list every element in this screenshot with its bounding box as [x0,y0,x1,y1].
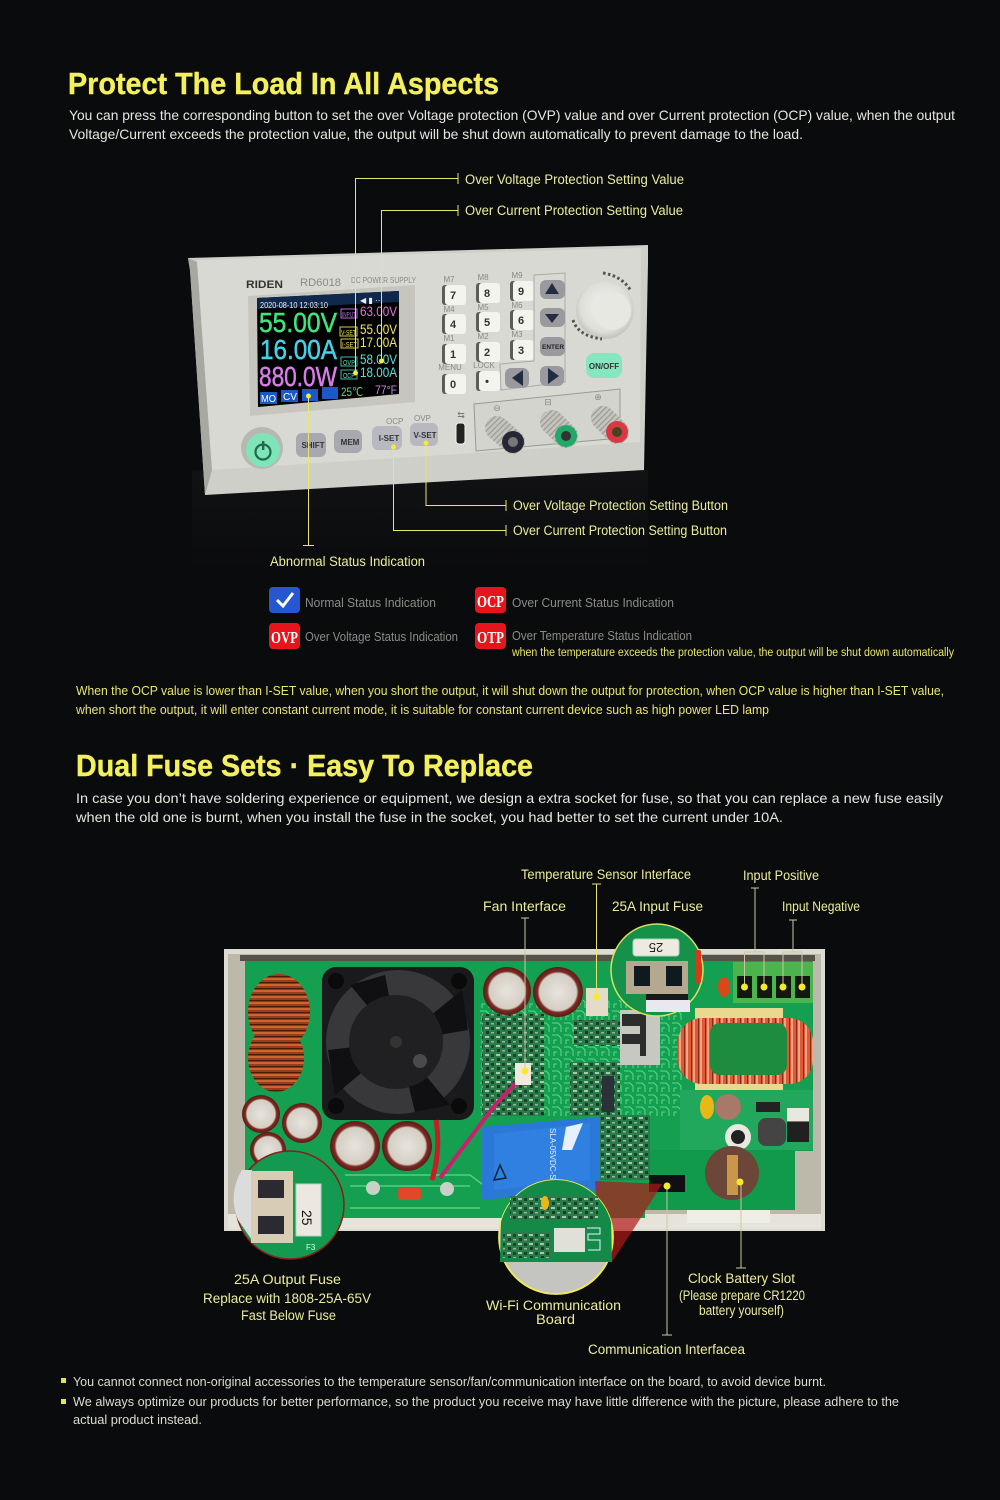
label: communication interface: Communication Interfacea [588,1342,745,1357]
power section components [700,1094,809,1150]
brand text: RIDEN [246,279,283,291]
numeric keypad: M1 [443,334,455,343]
numeric keypad: • [485,376,489,388]
function buttons: OVP [414,414,431,423]
rotary encoder knob [573,273,634,339]
label: clock battery slot: battery yourself) [699,1303,784,1318]
numeric keypad: 7 [450,290,456,302]
footnote: accessories warning: You cannot connect non-original accessories to the temperature sensor/fan/communication interface on the board, to avoid device burnt. [73,1374,826,1389]
magnifier: output fuse [234,1151,344,1259]
brand text: DC POWER SUPPLY [351,276,417,285]
numeric keypad: 9 [518,286,524,298]
callout lines: PCB [521,884,806,1335]
LCD screen: 55.00V [360,321,398,337]
function buttons [296,414,438,457]
power button [241,427,283,469]
magnifier: output fuse: 25 [299,1210,315,1226]
note: OCP and I-SET behaviour [75,683,944,717]
LCD screen: 58.00V [360,351,398,367]
magnifier: output fuse: F3 [306,1243,316,1252]
intro paragraph: Voltage/Current exceeds the protection value, the output will be shut down automatically to prevent damage to the load. [69,126,803,142]
LCD screen: 77°F [375,383,397,397]
numeric keypad: M4 [443,305,455,314]
LCD screen [257,291,399,407]
LCD screen: 63.00V [360,303,398,319]
brand text [246,276,417,291]
footnote: product optimization: actual product instead. [73,1412,202,1427]
label: over current protection value: Over Current Protection Setting Value [465,203,683,218]
numeric keypad: M7 [443,275,455,284]
icon: OCP status [475,587,506,613]
function buttons: SHIFT [301,441,325,450]
LCD screen: INPUT [342,312,356,319]
intro paragraph: You can press the corresponding button to set the over Voltage protection (OVP) value and over Current protection (OCP) value, when the output [69,107,955,123]
text: over temperature status [511,629,954,659]
arrow and enter buttons: ENTER [542,344,564,351]
red zoom cone [595,1181,662,1262]
numeric keypad: 6 [518,315,524,327]
brand text: RD6018 [300,277,341,289]
label: clock battery slot: (Please prepare CR1220 [679,1288,805,1303]
icon: OVP status [269,623,300,649]
icon: OCP status: OCP [477,592,504,611]
text: over temperature status: Over Temperature Status Indication [512,629,692,643]
numeric keypad: M6 [511,301,523,310]
temperature sensor [586,988,608,1016]
USB port: ⇆ [457,410,465,420]
magnifier: Wi-Fi board [499,1180,613,1294]
numeric keypad: M8 [477,273,489,282]
label: input negative: Input Negative [782,899,860,914]
title: protect the load: Protect The Load In All Aspects [68,66,499,101]
note: OCP and I-SET behaviour: When the OCP value is lower than I-SET value, when you short the output, it will shut down the output for protection, when OCP value is higher than I-SET value, [76,683,944,698]
label: Wi-Fi communication board [486,1298,621,1327]
LCD screen: 18.00A [360,364,398,380]
text: over voltage status: Over Voltage Status Indication [305,630,458,644]
text: normal status: Normal Status Indication [305,596,436,610]
numeric keypad: MENU [438,363,462,372]
callout lines: protection setting values [353,173,458,376]
footnote: product optimization: We always optimize our products for better performance, so the product you receive may have little difference with the picture, please adhere to the [73,1394,899,1409]
title: dual fuse sets: Dual Fuse Sets · Easy To Replace [76,748,533,783]
clock battery holder [705,1146,759,1200]
LCD screen: OVP [343,360,355,367]
fuse paragraph: when the old one is burnt, when you install the fuse in the socket, you had better to set the current under 10A. [75,809,783,825]
on/off button: ON/OFF [589,362,619,371]
LCD screen: MO [261,394,276,405]
label: over voltage protection button: Over Voltage Protection Setting Button [513,498,728,513]
label: fan interface: Fan Interface [483,899,566,914]
numeric keypad: M9 [511,271,523,280]
label: over current protection button: Over Current Protection Setting Button [513,523,727,538]
numeric keypad: 8 [484,288,490,300]
output terminals [474,389,628,453]
LCD screen: I-SET [342,342,358,349]
label: 25A output fuse [203,1272,371,1323]
icon: OVP status: OVP [271,628,298,647]
device: RD6018 power supply front panel [188,245,648,495]
numeric keypad: 5 [484,317,490,329]
numeric keypad: 3 [518,345,524,357]
relay [482,1117,600,1200]
electrolytic capacitors [242,967,583,1171]
cooling fan [322,967,474,1120]
on/off button [586,353,622,378]
numeric keypad: M5 [477,303,489,312]
label: Wi-Fi communication board: Board [536,1312,575,1327]
relay: SLA-05VDC-SL [548,1128,557,1185]
fuse paragraph: In case you don’t have soldering experience or equipment, we design a extra socket for fuse, so that you can replace a new fuse easily [76,790,943,806]
LCD screen: CV [283,392,297,403]
text: over current status: Over Current Status Indication [512,596,674,610]
LCD screen: 2020-08-10 12:03:10 [260,301,328,310]
PCB photo in enclosure [224,924,825,1294]
fan connector [515,1063,531,1085]
function buttons: I-SET [379,434,399,443]
magnifier: input fuse: 25 [649,940,663,955]
label: clock battery slot: Clock Battery Slot [688,1271,795,1286]
note: OCP and I-SET behaviour: when short the output, it will enter constant current mode, it is suitable for constant current device such as high power LED lamp [75,702,769,717]
label: temperature sensor interface: Temperature Sensor Interface [521,867,691,882]
icon: OTP status [475,623,506,649]
small input capacitor [718,977,730,997]
label: 25A input fuse: 25A Input Fuse [612,899,703,914]
numeric keypad: 1 [450,349,456,361]
LCD screen: 16.00A [260,334,337,365]
numeric keypad [438,271,534,394]
footnote: product optimization [61,1394,899,1427]
bottom latches [687,1210,770,1223]
function buttons: MEM [341,438,360,447]
label: 25A output fuse: Replace with 1808-25A-65V [203,1291,371,1306]
LCD screen: 55.00V [259,307,337,338]
label: input positive: Input Positive [743,868,819,883]
label: 25A output fuse: 25A Output Fuse [234,1272,341,1287]
LCD screen: V-SET [341,330,357,337]
communication header [649,1175,685,1192]
numeric keypad: 2 [484,347,490,359]
numeric keypad: M3 [511,330,523,339]
function buttons: OCP [386,417,403,426]
callout lines: protection buttons and status [303,394,506,546]
label: abnormal status indication: Abnormal Status Indication [270,554,425,569]
numeric keypad: M2 [477,332,489,341]
function buttons: V-SET [413,431,437,440]
numeric keypad: LOCK [473,361,496,370]
LCD screen: 25℃ [341,385,363,399]
label: clock battery slot [679,1271,805,1318]
device reflection [192,470,648,570]
fuse paragraph [75,790,943,825]
LCD screen: ◀ ▮ ⋯ [360,296,383,305]
numeric keypad: 0 [450,379,456,391]
red resistor and screws [366,1181,454,1200]
magnifier: input fuse [611,924,703,1016]
arrow and enter buttons [500,273,565,390]
LCD screen: 880.0W [259,361,337,392]
text: over temperature status: when the temperature exceeds the protection value, the output will be shut down automatically [511,647,954,659]
heatsink component [620,1010,660,1065]
LCD screen: 17.00A [360,334,398,350]
label: 25A output fuse: Fast Below Fuse [241,1308,336,1323]
USB port [456,410,465,444]
output terminals: ⊕ [594,392,602,402]
common mode choke [678,1008,813,1090]
label: Wi-Fi communication board: Wi-Fi Communication [486,1298,621,1313]
numeric keypad: 4 [450,319,457,331]
output terminals: ⊟ [544,397,552,407]
fan wires [432,1076,523,1180]
label: over voltage protection value: Over Voltage Protection Setting Value [465,172,684,187]
icon: OTP status: OTP [477,628,504,647]
output terminals: ⊖ [493,403,501,413]
icon: normal status check [269,587,300,613]
input terminal block [733,962,813,1003]
intro paragraph [69,107,955,142]
toroid inductor [248,974,310,1092]
LCD screen: OCP [343,373,355,380]
